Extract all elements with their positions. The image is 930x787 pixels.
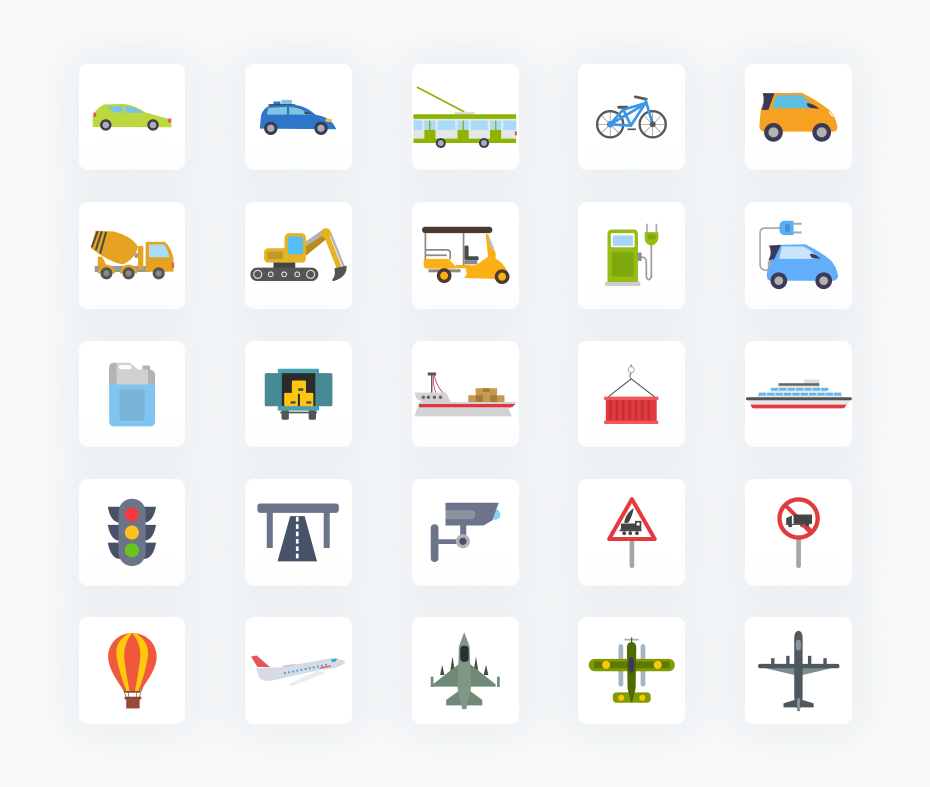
panel: blue car card: [245, 64, 352, 170]
icon: no trucks road sign: [777, 497, 820, 568]
panel: delivery truck card: [245, 341, 352, 447]
icon: hot air balloon: [108, 633, 157, 708]
panel: grey military plane card: [745, 617, 852, 724]
panel: jerry can card: [79, 341, 185, 447]
panel: CCTV camera card: [412, 479, 518, 586]
panel: charging station card: [578, 202, 684, 309]
panel: tuk-tuk card: [412, 202, 518, 309]
icon: blue car with roof rack: [260, 100, 336, 135]
panel: ferry card: [745, 341, 852, 447]
icon: train warning road sign: [607, 497, 657, 568]
icon: green hatchback car: [92, 104, 172, 131]
panel: toll road card: [245, 479, 352, 586]
icon: road under gantry: [257, 504, 339, 562]
icon: traffic light: [108, 498, 156, 566]
panel: hot air balloon card: [79, 617, 185, 724]
panel: traffic light card: [79, 479, 185, 586]
icon: tracked excavator: [250, 228, 347, 281]
panel: excavator card: [245, 202, 352, 309]
icon: cargo ship: [414, 372, 516, 416]
icon: green biplane top view: [588, 637, 675, 703]
panel: biplane card: [578, 617, 684, 724]
icon: grey propeller aircraft: [758, 630, 840, 712]
panel: orange car card: [745, 64, 852, 170]
panel: electric car card: [745, 202, 852, 309]
icon: red shipping container on hook: [604, 364, 658, 424]
icon: concrete mixer truck: [90, 230, 174, 280]
panel: railway crossing sign card: [578, 479, 684, 586]
icon: passenger ferry: [746, 380, 852, 408]
panel: bicycle card: [578, 64, 684, 170]
icon: fighter jet: [430, 632, 500, 710]
panel: fighter jet card: [412, 617, 518, 724]
icon: green trolleybus: [413, 86, 517, 148]
icon: blue electric car with plug: [759, 220, 838, 290]
panel: concrete mixer card: [79, 202, 185, 309]
panel: trolleybus card: [412, 64, 518, 170]
icon: yellow auto rickshaw: [422, 226, 510, 284]
panel: airliner card: [245, 617, 352, 724]
icon: blue jerry can: [109, 362, 156, 426]
panel: container card: [578, 341, 684, 447]
icon: green EV charging station: [605, 224, 658, 286]
icon: passenger airliner: [251, 656, 346, 686]
panel: green hatchback card: [79, 64, 185, 170]
panel: cargo ship card: [412, 341, 518, 447]
icon: open truck with boxes: [264, 368, 332, 420]
icon: security camera: [430, 502, 500, 562]
icon: orange compact car: [759, 92, 838, 142]
icon: blue bicycle: [596, 96, 667, 138]
panel: no trucks sign card: [745, 479, 852, 586]
